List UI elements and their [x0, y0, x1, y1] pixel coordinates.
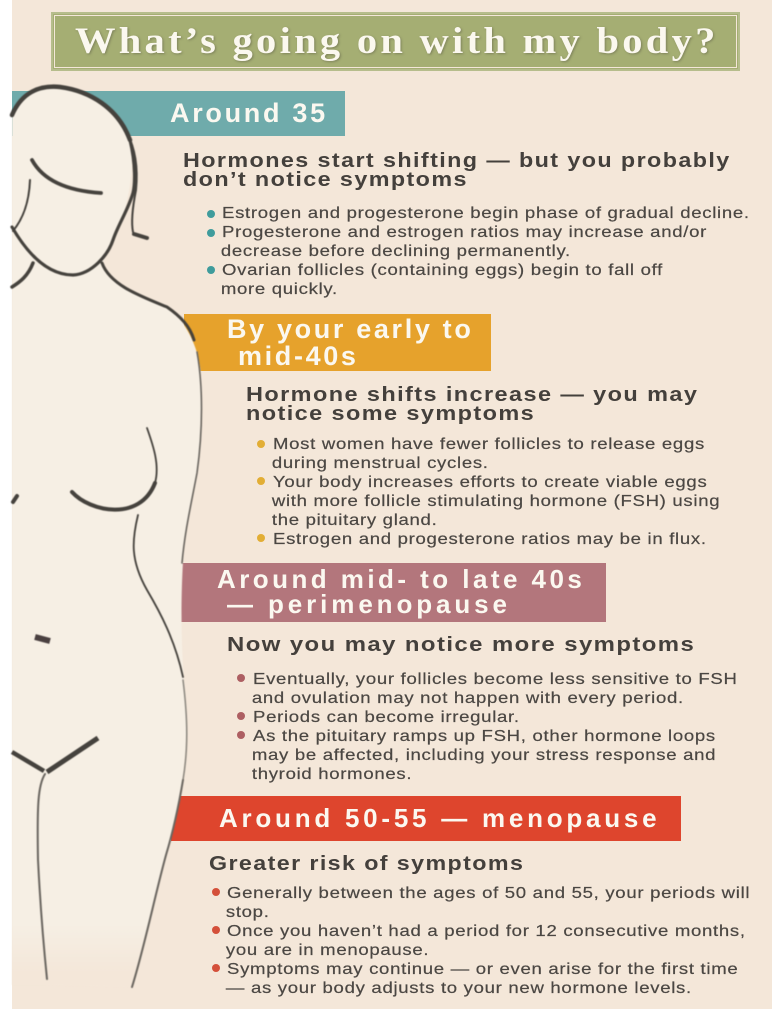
section 1 bullets: Estrogen and progesterone begin phase of gradual decline. — [222, 205, 750, 222]
section 2 bullets: the pituitary gland. — [272, 512, 437, 529]
section 2 heading — [246, 384, 698, 425]
section 1 bullets: more quickly. — [221, 281, 338, 298]
section 2 bullets: Most women have fewer follicles to release eggs — [273, 436, 705, 453]
section 1 heading: don’t notice symptoms — [183, 169, 468, 191]
section 2 heading: notice some symptoms — [246, 403, 535, 425]
title: What’s going on with my body? — [75, 21, 719, 62]
band: mid to late 40s: Around mid- to late 40s — [217, 564, 585, 594]
section 4 heading: Greater risk of symptoms — [209, 853, 524, 875]
section 4 bullets: you are in menopause. — [226, 942, 429, 959]
section 1 heading: Hormones start shifting — but you probably — [183, 150, 731, 172]
band: early to mid-40s — [184, 314, 491, 371]
right leg outer line — [132, 780, 183, 987]
left mark — [13, 496, 17, 502]
neck and shoulder — [102, 263, 194, 340]
section 2 bullets: with more follicle stimulating hormone (FSH) using — [272, 493, 720, 510]
section 3 bullets: may be affected, including your stress response and — [252, 747, 716, 764]
section 4 bullets — [212, 885, 750, 997]
title banner — [51, 12, 740, 71]
section 1 heading — [183, 150, 731, 191]
section 2 bullets — [257, 436, 720, 548]
section 1 bullets — [207, 205, 750, 298]
section 1 bullets: Ovarian follicles (containing eggs) begin to fall off — [222, 262, 663, 279]
band: mid to late 40s — [179, 563, 606, 622]
hip line — [183, 680, 187, 780]
band: early to mid-40s: By your early to — [227, 314, 473, 344]
inner leg — [38, 774, 47, 979]
section 3 bullets: and ovulation may not happen with every period. — [252, 690, 684, 707]
section 1 bullets: Progesterone and estrogen ratios may increase and/or — [222, 224, 707, 241]
section 3 bullets: Periods can become irregular. — [253, 709, 520, 726]
section 3 bullets: thyroid hormones. — [252, 766, 412, 783]
section 4 bullets: Once you haven’t had a period for 12 consecutive months, — [227, 923, 746, 940]
right arm side line — [182, 352, 202, 563]
section 2 bullets: Your body increases efforts to create viable eggs — [273, 474, 707, 491]
left cheek — [13, 180, 30, 231]
section 4 bullets: — as your body adjusts to your new hormone levels. — [226, 980, 692, 997]
section 2 bullets: Estrogen and progesterone ratios may be in flux. — [273, 531, 707, 548]
section 3 bullets: As the pituitary ramps up FSH, other hormone loops — [253, 728, 716, 745]
section 3 bullets: Eventually, your follicles become less sensitive to FSH — [253, 671, 738, 688]
section 3 bullets — [237, 671, 738, 783]
band: early to mid-40s: mid-40s — [238, 341, 359, 371]
hair strand — [127, 133, 137, 232]
section 1 bullets: decrease before declining permanently. — [221, 243, 571, 260]
silhouette fill — [12, 87, 202, 987]
section 4 bullets: Symptoms may continue — or even arise for the first time — [227, 961, 738, 978]
band: 50-55: Around 50-55 — menopause — [219, 803, 660, 833]
head top outline — [12, 87, 130, 140]
band: around 35: Around 35 — [170, 98, 328, 128]
groin right — [47, 738, 98, 772]
band: around 35 — [12, 91, 345, 136]
head and chin outline — [12, 140, 135, 275]
navel — [35, 637, 50, 641]
section 2 bullets: during menstrual cycles. — [272, 455, 489, 472]
section 3 heading: Now you may notice more symptoms — [227, 634, 695, 656]
closed eye — [32, 160, 101, 193]
section 4 bullets: Generally between the ages of 50 and 55, your periods will — [227, 885, 750, 902]
band: 50-55 — [171, 796, 681, 841]
section 4 bullets: stop. — [226, 904, 270, 921]
section 2 heading: Hormone shifts increase — you may — [246, 384, 698, 406]
torso waist line — [134, 515, 183, 677]
band: mid to late 40s: — perimenopause — [227, 589, 511, 619]
breast — [147, 428, 157, 483]
groin left — [12, 752, 44, 771]
